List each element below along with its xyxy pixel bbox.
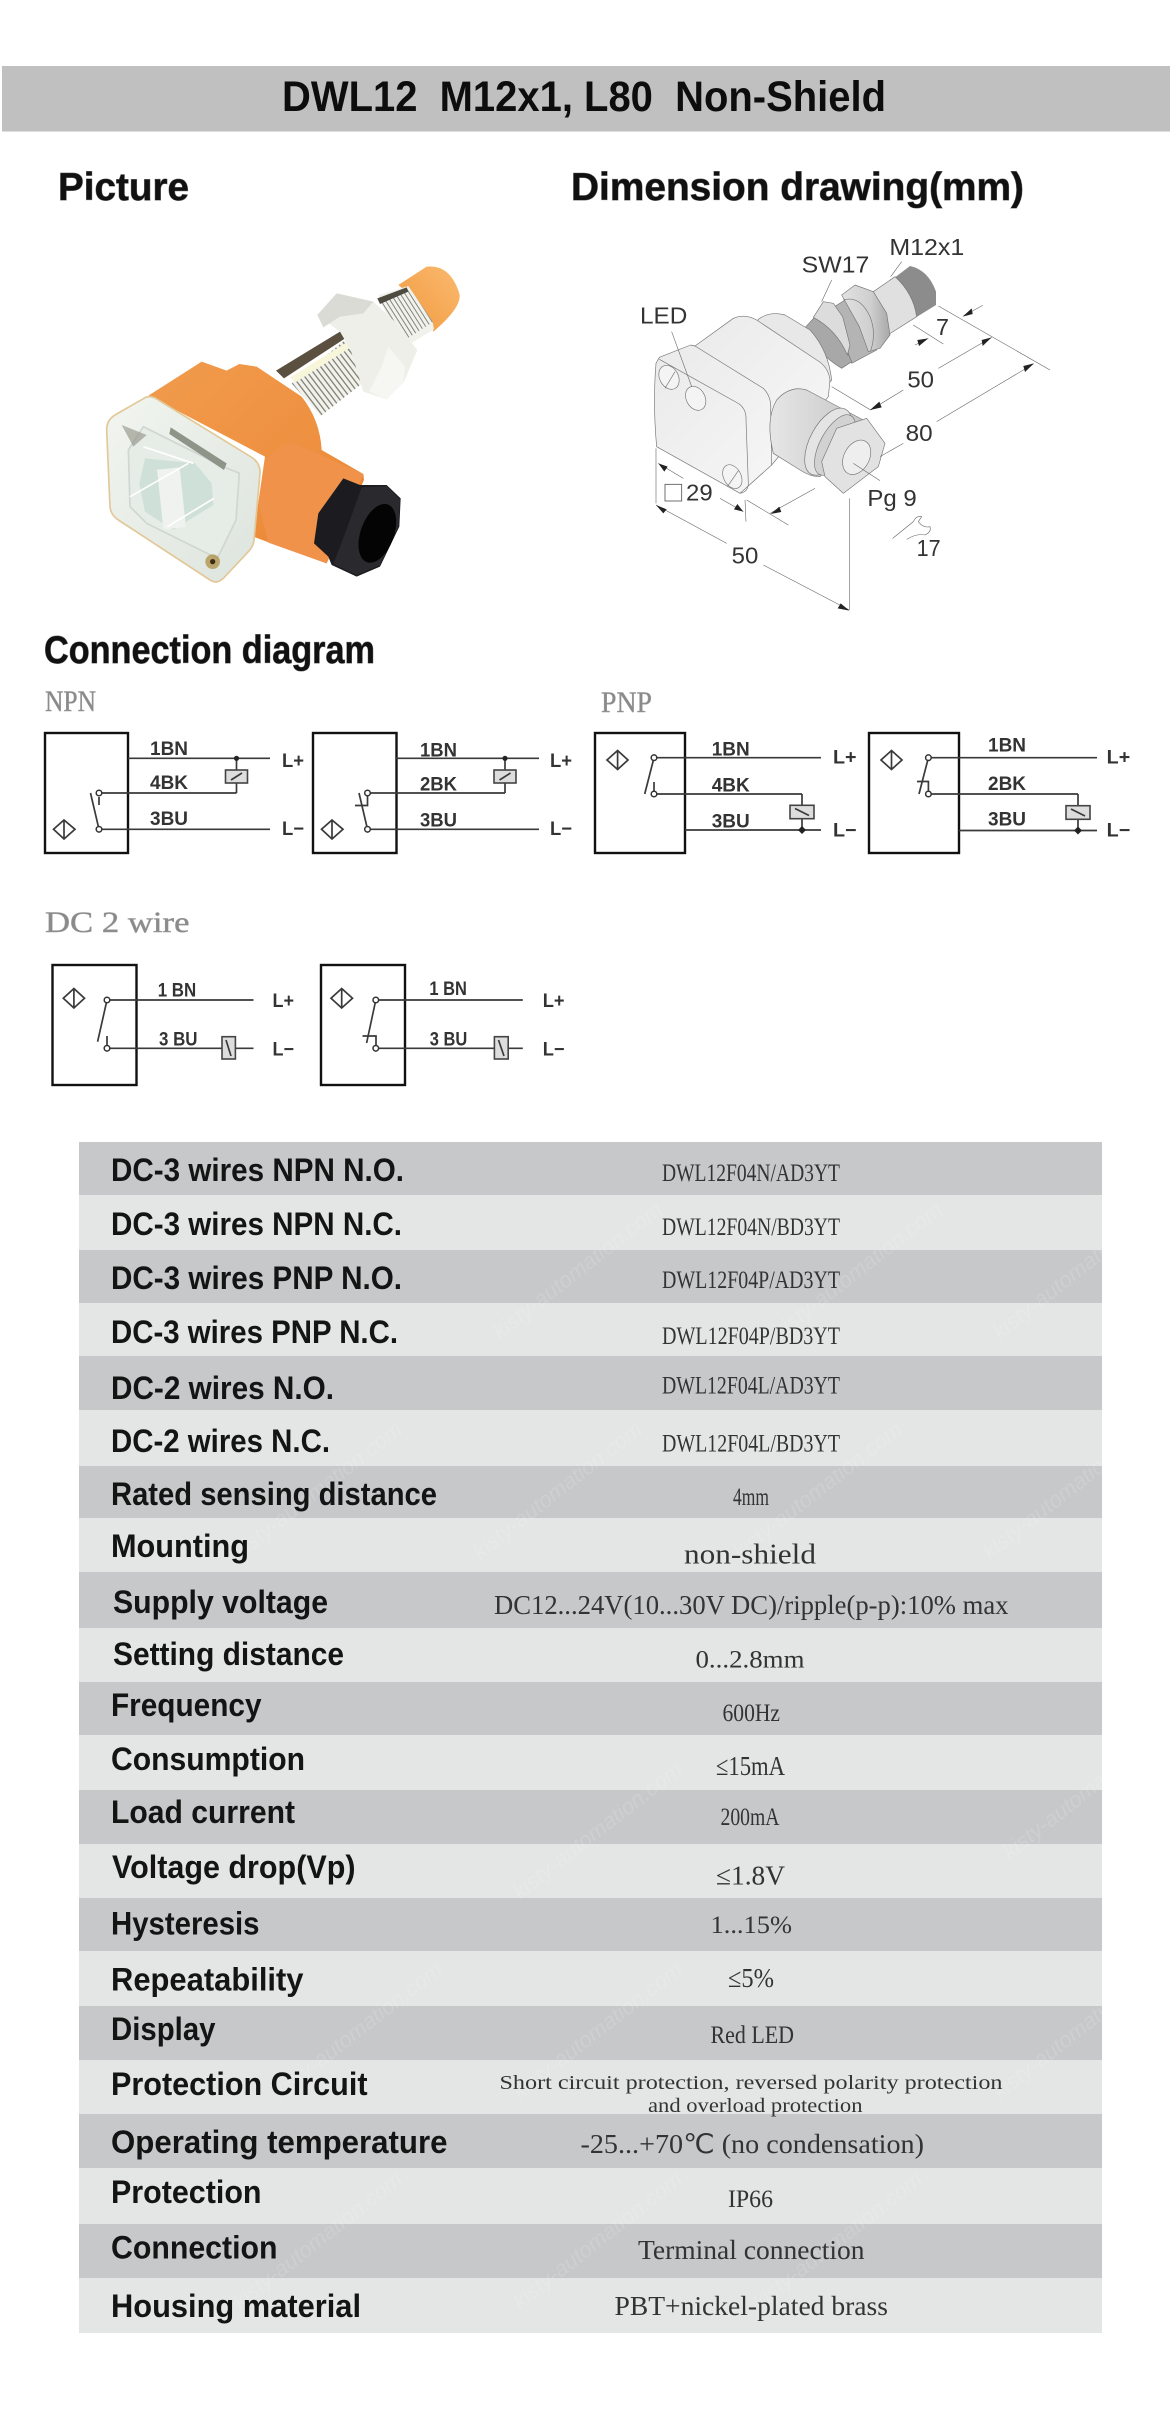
dimension drawing (640, 234, 1050, 611)
row values: ≤5% (728, 1963, 774, 1993)
row values: 1...15% (710, 1912, 792, 1939)
row labels: Display (111, 2011, 216, 2047)
row labels: Load current (111, 1794, 295, 1830)
watermark text: kisty-automation.com (978, 1416, 1157, 1564)
row values: DWL12F04P/AD3YT (662, 1267, 840, 1294)
wiring diagram: PNP N.O.: L− (833, 821, 856, 842)
dimension labels (640, 234, 964, 568)
row labels: Protection Circuit (111, 2066, 368, 2102)
label: DC 2 wire: DC 2 wire (45, 906, 190, 939)
wiring diagram: DC 2 wire N.C.: 3 BU (430, 1030, 467, 1051)
row values: DWL12F04N/BD3YT (662, 1214, 840, 1241)
row labels: Frequency (111, 1687, 262, 1723)
dimension labels: 7 (936, 314, 949, 340)
wiring diagram: NPN N.C.: L+ (550, 751, 572, 772)
wiring diagram: NPN N.C.: 3BU (420, 811, 457, 832)
wiring diagram: NPN N.C.: L− (550, 819, 572, 840)
row labels: Hysteresis (111, 1906, 260, 1942)
watermark text: kisty-automation.com (508, 1756, 687, 1904)
row values: 4mm (733, 1484, 769, 1511)
watermark text: kisty-automation.com (488, 1196, 667, 1344)
wiring diagram: NPN N.O. (45, 733, 304, 853)
title banner (2, 66, 1170, 132)
row labels (111, 1152, 448, 2324)
row values: Red LED (710, 2022, 794, 2049)
row values: and overload protection (648, 2095, 862, 2117)
dimension labels: 17 (917, 535, 941, 561)
wiring diagram: DC 2 wire N.C.: L+ (543, 991, 564, 1012)
row labels: Consumption (111, 1741, 305, 1777)
row values: non-shield (684, 1540, 816, 1570)
product photo: orange inductive sensor (107, 266, 460, 582)
row labels: DC-2 wires N.O. (111, 1370, 334, 1406)
watermark text: kisty-automation.com (508, 2166, 687, 2314)
watermark text: kisty-automation.com (508, 1956, 687, 2104)
wiring diagram: NPN N.C.: 1BN (420, 740, 457, 761)
wiring diagram: DC 2 wire N.C.: 1 BN (429, 979, 467, 1000)
row labels: Mounting (111, 1528, 249, 1564)
wiring diagram: NPN N.O.: L− (282, 819, 304, 840)
row values: DC12...24V(10...30V DC)/ripple(p-p):10% max (494, 1590, 1009, 1620)
watermark text (228, 1196, 1170, 2314)
wiring diagram: PNP N.O.: L+ (833, 747, 856, 768)
row values (494, 1160, 1009, 2321)
dimension labels: Pg 9 (867, 485, 917, 511)
holes and LED (655, 362, 746, 492)
wiring diagram: NPN N.C. (313, 733, 572, 853)
row labels: Connection (111, 2230, 278, 2266)
wiring diagram: NPN N.C.: 2BK (420, 775, 457, 796)
wiring diagram: NPN N.O.: L+ (282, 751, 304, 772)
row values: DWL12F04N/AD3YT (662, 1160, 840, 1187)
wiring diagram: DC 2 wire N.O.: L− (272, 1040, 294, 1061)
wiring diagram: NPN N.O.: 4BK (150, 773, 188, 794)
row values: 600Hz (722, 1700, 780, 1727)
wiring diagram: PNP N.C. (869, 733, 1130, 853)
row labels: Operating temperature (111, 2124, 448, 2160)
wiring diagram: PNP N.O. (595, 733, 856, 853)
row values: 200mA (720, 1804, 780, 1831)
sensor body and front plate (654, 314, 832, 493)
dimension labels: 29 (686, 480, 713, 506)
watermark text: kisty-automation.com (988, 1956, 1167, 2104)
row values: DWL12F04L/BD3YT (662, 1430, 840, 1458)
wiring diagram: PNP N.C.: 3BU (988, 810, 1026, 831)
wiring diagram: PNP N.C.: 2BK (988, 774, 1026, 795)
dimension labels: 50 (732, 542, 758, 568)
watermark text: kisty-automation.com (768, 1196, 947, 1344)
dimension labels: 80 (906, 420, 933, 446)
wiring diagram: DC 2 wire N.C. (321, 965, 564, 1085)
wiring diagram: DC 2 wire N.O.: 1 BN (158, 981, 196, 1002)
row values: Short circuit protection, reversed polarity protection (500, 2072, 1002, 2094)
heading: Connection diagram: Connection diagram (44, 629, 375, 672)
wiring diagram: PNP N.O.: 1BN (712, 740, 750, 761)
row values: IP66 (728, 2186, 773, 2213)
row values: ≤15mA (716, 1751, 785, 1781)
watermark text: kisty-automation.com (468, 1416, 647, 1564)
heading: Dimension drawing: Dimension drawing(mm) (571, 166, 1024, 209)
dimension lines and arrows (656, 262, 1050, 610)
dimension labels: SW17 (802, 252, 869, 278)
wiring diagram: PNP N.O.: 4BK (712, 776, 750, 797)
wiring diagram: DC 2 wire N.C.: L− (543, 1040, 564, 1061)
dimension labels: 50 (907, 367, 934, 393)
wiring diagram: PNP N.C.: 1BN (988, 736, 1026, 757)
wiring diagram: PNP N.O.: 3BU (712, 812, 750, 833)
watermark text: kisty-automation.com (228, 1416, 407, 1564)
watermark text: kisty-automation.com (748, 2166, 927, 2314)
row labels: Protection (111, 2174, 262, 2210)
specification table (79, 1142, 1170, 2333)
row labels: DC-3 wires NPN N.C. (111, 1206, 402, 1242)
row values: PBT+nickel-plated brass (614, 2291, 888, 2321)
row values: Terminal connection (638, 2235, 865, 2265)
cable gland (770, 389, 885, 493)
title banner: DWL12 M12x1, L80 Non-Shield (282, 73, 886, 121)
wiring diagram: DC 2 wire N.O.: L+ (272, 991, 294, 1012)
wiring diagram: NPN N.O.: 1BN (150, 739, 188, 760)
row labels: Setting distance (113, 1636, 344, 1672)
arrowheads (656, 308, 1034, 611)
row values: -25...+70℃ (no condensation) (580, 2129, 924, 2159)
watermark text: kisty-automation.com (728, 1416, 907, 1564)
wiring diagram: PNP N.C.: L+ (1107, 747, 1130, 768)
wiring diagram: PNP N.C.: L− (1107, 821, 1130, 842)
row labels: Voltage drop(Vp) (112, 1849, 356, 1885)
row values: ≤1.8V (716, 1860, 785, 1890)
dimension labels: M12x1 (889, 234, 964, 260)
wiring diagram: NPN N.O.: 3BU (150, 809, 188, 830)
row labels: DC-3 wires PNP N.C. (111, 1314, 398, 1350)
row labels: DC-2 wires N.C. (111, 1423, 330, 1459)
row values: 0...2.8mm (696, 1646, 805, 1674)
row values: DWL12F04L/AD3YT (662, 1372, 840, 1400)
row labels: DC-3 wires PNP N.O. (111, 1260, 402, 1296)
label: NPN: NPN (45, 685, 96, 718)
row labels: Housing material (111, 2288, 361, 2324)
row labels: DC-3 wires NPN N.O. (111, 1152, 404, 1188)
heading: Picture: Picture (58, 166, 189, 209)
row labels: Rated sensing distance (111, 1476, 437, 1512)
row labels: Repeatability (111, 1962, 304, 1998)
table row backgrounds (79, 1142, 1102, 2333)
watermark text: kisty-automation.com (228, 2166, 407, 2314)
watermark text: kisty-automation.com (268, 1956, 447, 2104)
row values: DWL12F04P/BD3YT (662, 1323, 840, 1350)
wiring diagram: DC 2 wire N.O.: 3 BU (159, 1030, 198, 1051)
row labels: Supply voltage (113, 1584, 328, 1620)
label: PNP: PNP (601, 686, 652, 719)
dimension labels: LED (640, 302, 687, 328)
sensor tip and threaded barrel (805, 266, 936, 368)
watermark text: kisty-automation.com (988, 1196, 1167, 1344)
wiring diagram: DC 2 wire N.O. (52, 965, 294, 1085)
